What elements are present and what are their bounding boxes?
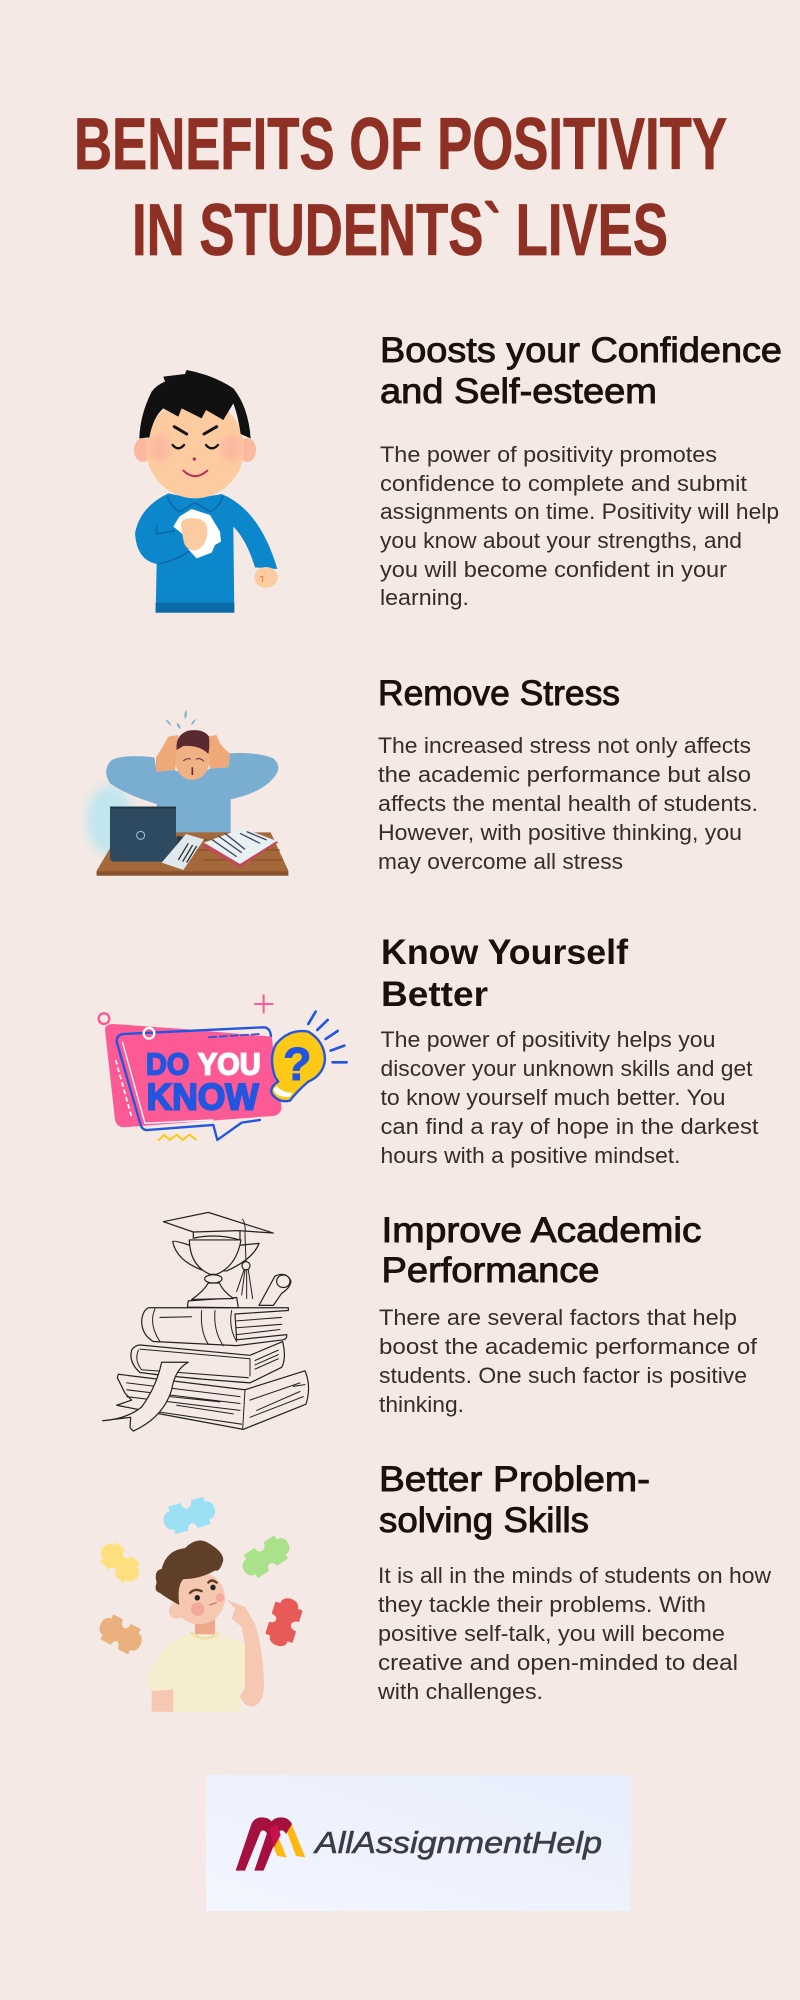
body text: to know yourself much better. You [380, 1085, 726, 1110]
body text: learning. [380, 585, 469, 610]
icon: confident boy with fist on chest [134, 370, 278, 613]
body text: The increased stress not only affects [378, 733, 751, 758]
body text: may overcome all stress [378, 849, 623, 874]
body text: with challenges. [377, 1679, 543, 1704]
heading: Improve Academic [382, 1211, 702, 1250]
body text: students. One such factor is positive [379, 1363, 747, 1388]
body text: affects the mental health of students. [378, 791, 758, 816]
heading: Remove Stress [378, 674, 620, 713]
panel: boosts your confidence [134, 331, 782, 613]
panel: improve academic performance [103, 1211, 758, 1431]
body text: creative and open-minded to deal [378, 1650, 738, 1675]
body text: the academic performance but also [378, 762, 751, 787]
icon: do you know badge [99, 995, 347, 1141]
body text: boost the academic performance of [379, 1334, 758, 1359]
icon: do you know badge: DO [146, 1048, 189, 1082]
body text: However, with positive thinking, you [378, 820, 742, 845]
body text: you will become confident in your [380, 557, 727, 582]
body text [377, 1563, 771, 1704]
body text: positive self-talk, you will become [378, 1621, 725, 1646]
icon: do you know badge: YOU [198, 1048, 261, 1082]
body text: There are several factors that help [379, 1305, 737, 1330]
body text [380, 1027, 758, 1168]
heading [381, 933, 628, 1014]
logo: AllAssignmentHelp [206, 1775, 631, 1911]
heading: Boosts your Confidence [380, 331, 782, 370]
body text: you know about your strengths, and [380, 528, 742, 553]
heading: Better Problem- [379, 1460, 650, 1499]
logo: AllAssignmentHelp: AllAssignmentHelp [313, 1825, 602, 1860]
panel: know yourself better [99, 933, 759, 1168]
panel: remove stress [87, 674, 758, 876]
body text [379, 1305, 758, 1417]
body text [380, 442, 779, 610]
heading: solving Skills [379, 1501, 589, 1540]
heading: and Self-esteem [380, 372, 657, 411]
body text: assignments on time. Positivity will help [380, 499, 779, 524]
body text [378, 733, 758, 874]
body text: they tackle their problems. With [378, 1592, 706, 1617]
panel: better problem-solving skills [91, 1460, 771, 1712]
icon: books with trophy and graduation cap [103, 1212, 309, 1431]
body text: hours with a positive mindset. [380, 1143, 680, 1168]
body text: The power of positivity promotes [380, 442, 717, 467]
body text: thinking. [379, 1392, 464, 1417]
icon: thinking boy with puzzle pieces [91, 1488, 311, 1712]
body text: The power of positivity helps you [380, 1027, 716, 1052]
body text: can find a ray of hope in the darkest [380, 1114, 758, 1139]
body text: It is all in the minds of students on how [378, 1563, 771, 1588]
heading: Performance [382, 1251, 600, 1290]
icon: do you know badge: KNOW [147, 1075, 259, 1117]
body text: discover your unknown skills and get [380, 1056, 752, 1081]
heading: Better [381, 975, 488, 1014]
heading [380, 331, 782, 411]
title [74, 104, 727, 271]
heading [382, 1211, 702, 1290]
heading: Know Yourself [381, 933, 628, 972]
body text: confidence to complete and submit [380, 471, 747, 496]
icon: stressed student at desk [87, 710, 288, 876]
icon: do you know badge: ? [283, 1038, 312, 1090]
icon: logo mark [236, 1817, 305, 1871]
heading [379, 1460, 650, 1540]
